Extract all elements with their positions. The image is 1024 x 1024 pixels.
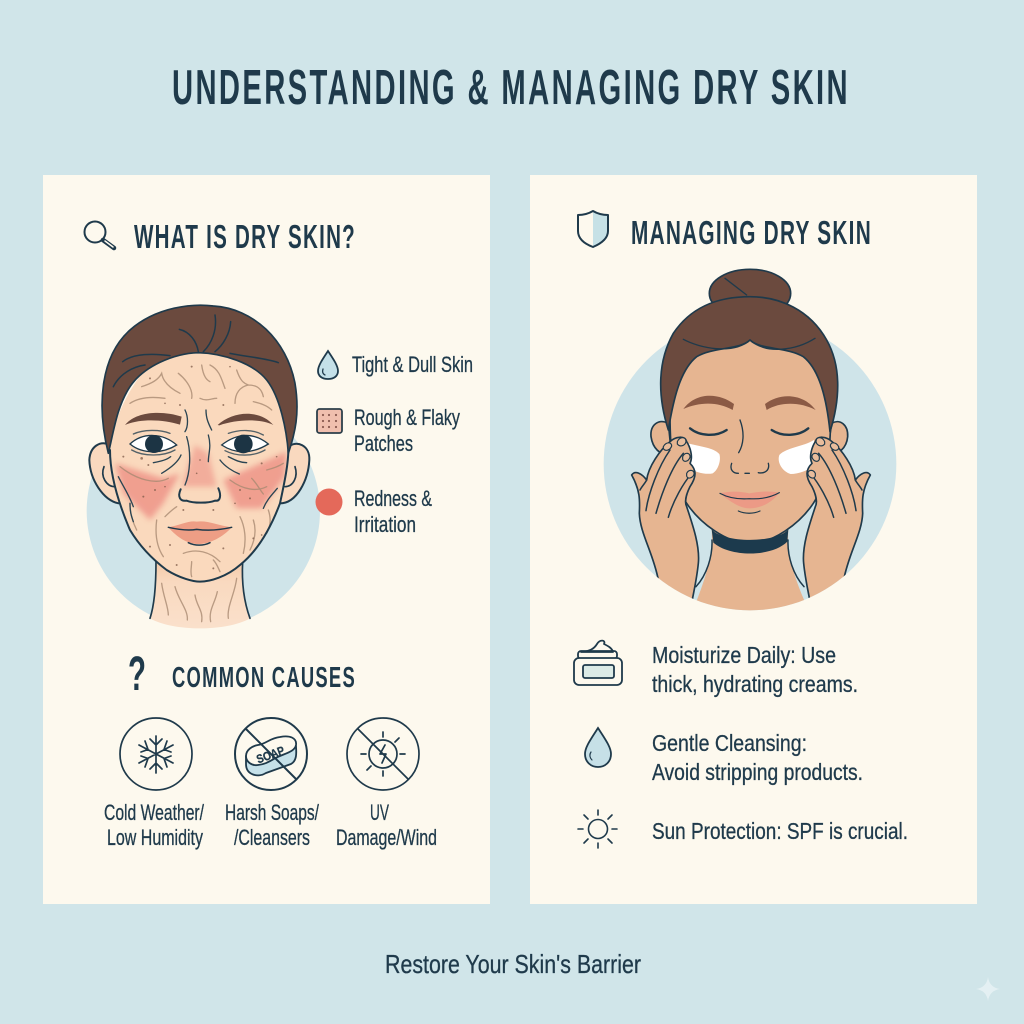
eyebrows xyxy=(125,413,273,425)
icon: sun xyxy=(578,810,617,848)
icon: snowflake xyxy=(120,718,192,790)
face outline xyxy=(110,450,288,582)
heading: common causes: COMMON CAUSES xyxy=(172,662,356,694)
closed eyes xyxy=(690,428,808,435)
icon: question mark: ? xyxy=(128,648,146,701)
cream patches xyxy=(688,440,814,474)
cause: harsh soaps: Harsh Soaps/ xyxy=(225,800,320,825)
right eye xyxy=(222,431,268,455)
icon: water drop xyxy=(585,728,611,767)
tip: moisturize daily xyxy=(574,641,858,697)
illustration: woman applying cream xyxy=(604,269,896,613)
symptom: redness and irritation: Irritation xyxy=(354,512,416,537)
cause: uv damage: UV xyxy=(370,800,389,825)
illustration: dry skin face xyxy=(87,305,320,628)
symptom: rough and flaky patches: Rough & Flaky xyxy=(354,405,461,430)
panel: managing dry skin xyxy=(530,175,977,904)
lips xyxy=(720,492,779,513)
symptom: redness and irritation: Redness & xyxy=(354,486,432,511)
tip: gentle cleansing: Gentle Cleansing: xyxy=(652,730,807,756)
lips xyxy=(168,521,232,545)
right hand xyxy=(803,437,870,603)
cause: cold weather: Cold Weather/ xyxy=(104,800,205,825)
symptom: tight and dull skin: Tight & Dull Skin xyxy=(352,352,473,377)
flake dots xyxy=(122,366,277,569)
heading: what is dry skin: WHAT IS DRY SKIN? xyxy=(134,218,356,255)
face xyxy=(670,337,831,543)
cause: cold weather: Low Humidity xyxy=(107,825,203,850)
left eye xyxy=(130,430,177,455)
hair xyxy=(661,297,838,432)
tip: gentle cleansing: Avoid stripping products. xyxy=(652,759,863,785)
tip: moisturize daily: thick, hydrating creams. xyxy=(652,671,858,697)
left hand xyxy=(632,437,699,603)
icon: cream jar xyxy=(574,641,622,685)
icon: magnifying glass xyxy=(84,222,114,248)
skin cracks xyxy=(118,365,283,622)
symptom: redness and irritation xyxy=(316,486,432,537)
panel: what is dry skin xyxy=(43,175,490,904)
heading: managing dry skin: MANAGING DRY SKIN xyxy=(631,214,872,251)
cause: harsh soaps: /Cleansers xyxy=(234,825,310,850)
eyebrows xyxy=(683,396,816,410)
tip: sun protection xyxy=(578,810,908,848)
tip: gentle cleansing xyxy=(585,728,863,785)
cause: uv damage: Damage/Wind xyxy=(336,825,437,850)
cause: harsh soaps xyxy=(225,718,320,850)
icon: crossed out sun xyxy=(347,718,419,790)
tip: sun protection: Sun Protection: SPF is crucial. xyxy=(652,818,908,844)
icon: crossed out soap: SOAP xyxy=(254,743,286,766)
hair xyxy=(102,305,297,453)
choker band xyxy=(712,529,788,554)
cause: cold weather xyxy=(104,718,205,850)
symptom: rough and flaky patches xyxy=(317,405,461,456)
tip: moisturize daily: Moisturize Daily: Use xyxy=(652,642,836,668)
neck xyxy=(696,530,805,610)
sparkle xyxy=(976,977,1000,1001)
bun xyxy=(709,269,791,317)
nose xyxy=(179,488,220,503)
nose xyxy=(731,420,769,473)
footer tagline: Restore Your Skin's Barrier xyxy=(385,949,641,979)
redness patches xyxy=(115,445,287,520)
symptom: tight and dull skin xyxy=(318,351,473,379)
cause: uv damage xyxy=(336,718,437,850)
icon: shield xyxy=(578,211,608,247)
ears xyxy=(651,422,848,457)
symptom: rough and flaky patches: Patches xyxy=(354,431,413,456)
